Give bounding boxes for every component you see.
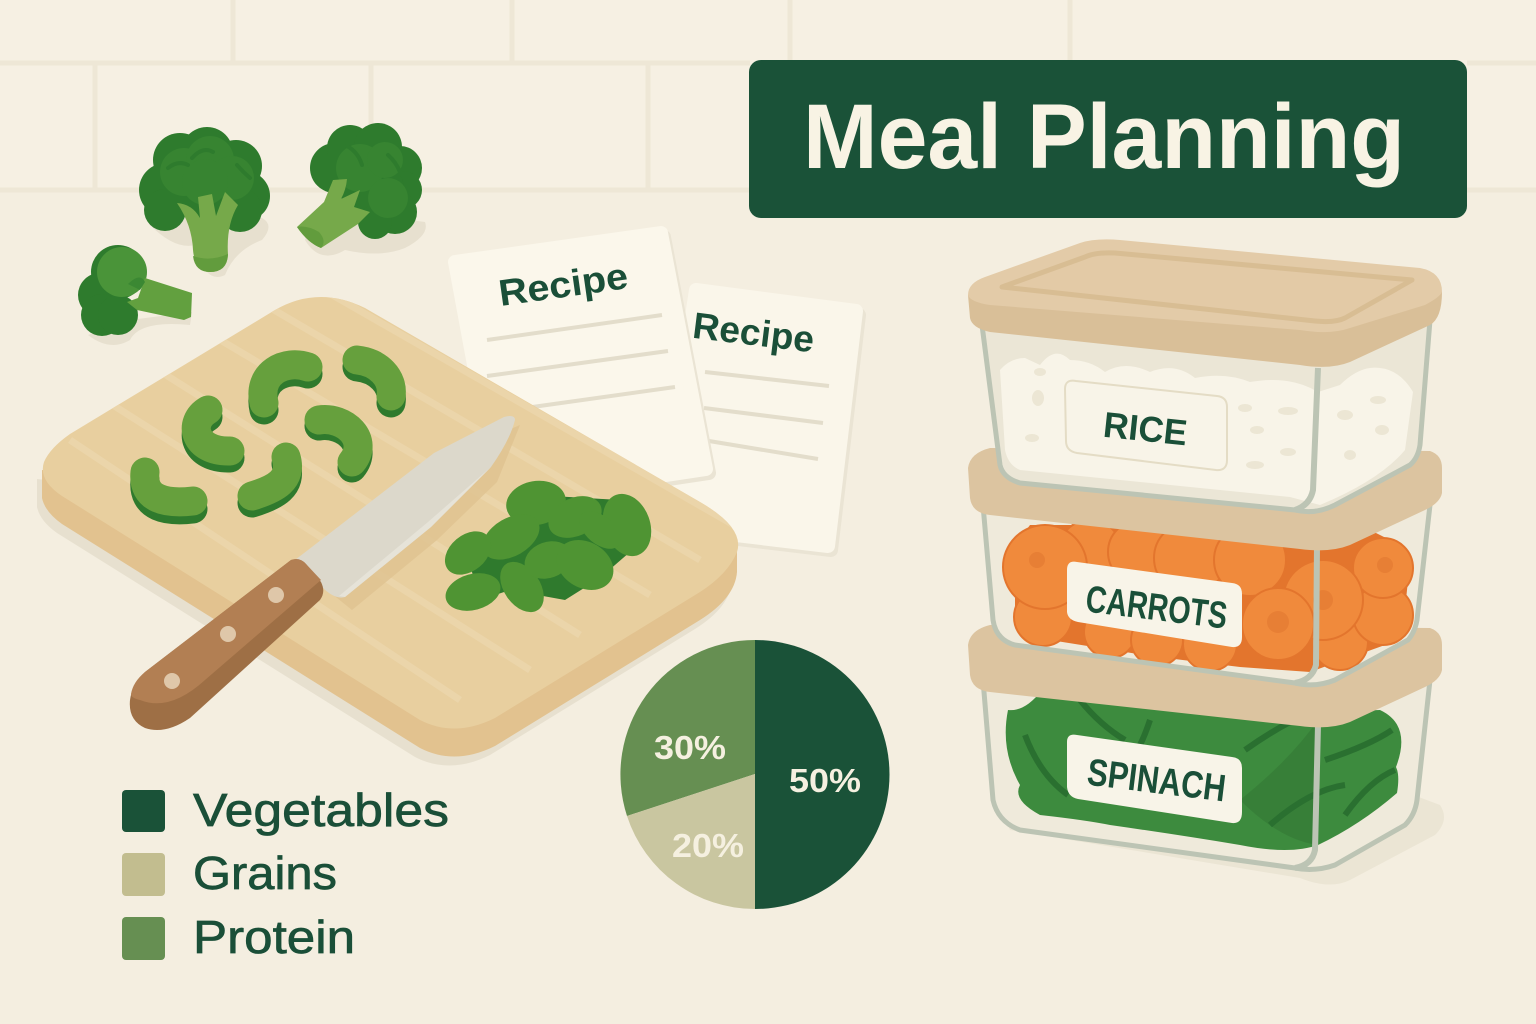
knife — [130, 416, 520, 730]
legend: protein: Protein — [193, 911, 355, 963]
container: rice — [968, 239, 1442, 512]
carrots lid — [968, 448, 1442, 550]
broccoli: upright — [139, 127, 270, 277]
rice filling — [1000, 354, 1413, 505]
container: carrots — [968, 448, 1442, 685]
slice: protein 30% — [620, 640, 755, 816]
pepper arc 5 — [145, 472, 193, 510]
legend: vegetables — [122, 784, 449, 836]
chopped greens pile — [437, 476, 660, 620]
recipe card: front: Recipe — [496, 255, 630, 314]
recipe card: front — [455, 233, 709, 504]
rice lid — [968, 239, 1442, 367]
slice: vegetables 50% — [755, 640, 890, 909]
pepper arc 3 — [196, 410, 230, 458]
spinach label: SPINACH — [1085, 752, 1228, 810]
label 20%: 20% — [672, 827, 744, 864]
recipe cards — [455, 233, 859, 550]
title banner — [749, 60, 1467, 218]
pepper arc 2 — [357, 360, 391, 403]
label 30%: 30% — [654, 729, 726, 766]
sliced green pepper arcs — [145, 360, 391, 510]
pepper arc 1 — [263, 365, 308, 410]
recipe card: back: Recipe — [690, 305, 817, 360]
broccoli florets — [78, 123, 426, 345]
carrots label: CARROTS — [1083, 579, 1229, 638]
spinach label — [1067, 735, 1242, 823]
pepper arc 6 — [252, 457, 288, 503]
knife handle — [130, 559, 323, 730]
rice label — [1065, 381, 1227, 470]
legend: vegetables: Vegetables — [193, 784, 449, 836]
container: spinach — [968, 625, 1442, 869]
pie chart — [620, 640, 890, 909]
recipe card: back — [660, 290, 859, 550]
broccoli: small lying — [78, 245, 192, 345]
legend: protein — [122, 911, 355, 963]
stacked containers — [968, 239, 1444, 885]
rice label: RICE — [1101, 404, 1189, 453]
title banner: Meal Planning — [803, 86, 1405, 188]
carrots label — [1067, 562, 1242, 647]
legend: grains — [122, 847, 337, 899]
label 50%: 50% — [789, 762, 861, 799]
spinach lid — [968, 625, 1442, 727]
pepper arc 4 — [319, 420, 358, 468]
legend: grains: Grains — [193, 847, 337, 899]
carrot slices — [1003, 520, 1413, 672]
slice: grains 20% — [627, 774, 755, 909]
spinach leaves — [1006, 690, 1401, 850]
knife blade — [295, 416, 520, 610]
legend — [122, 784, 449, 963]
cutting board — [37, 265, 760, 766]
broccoli: tilted — [297, 123, 426, 256]
